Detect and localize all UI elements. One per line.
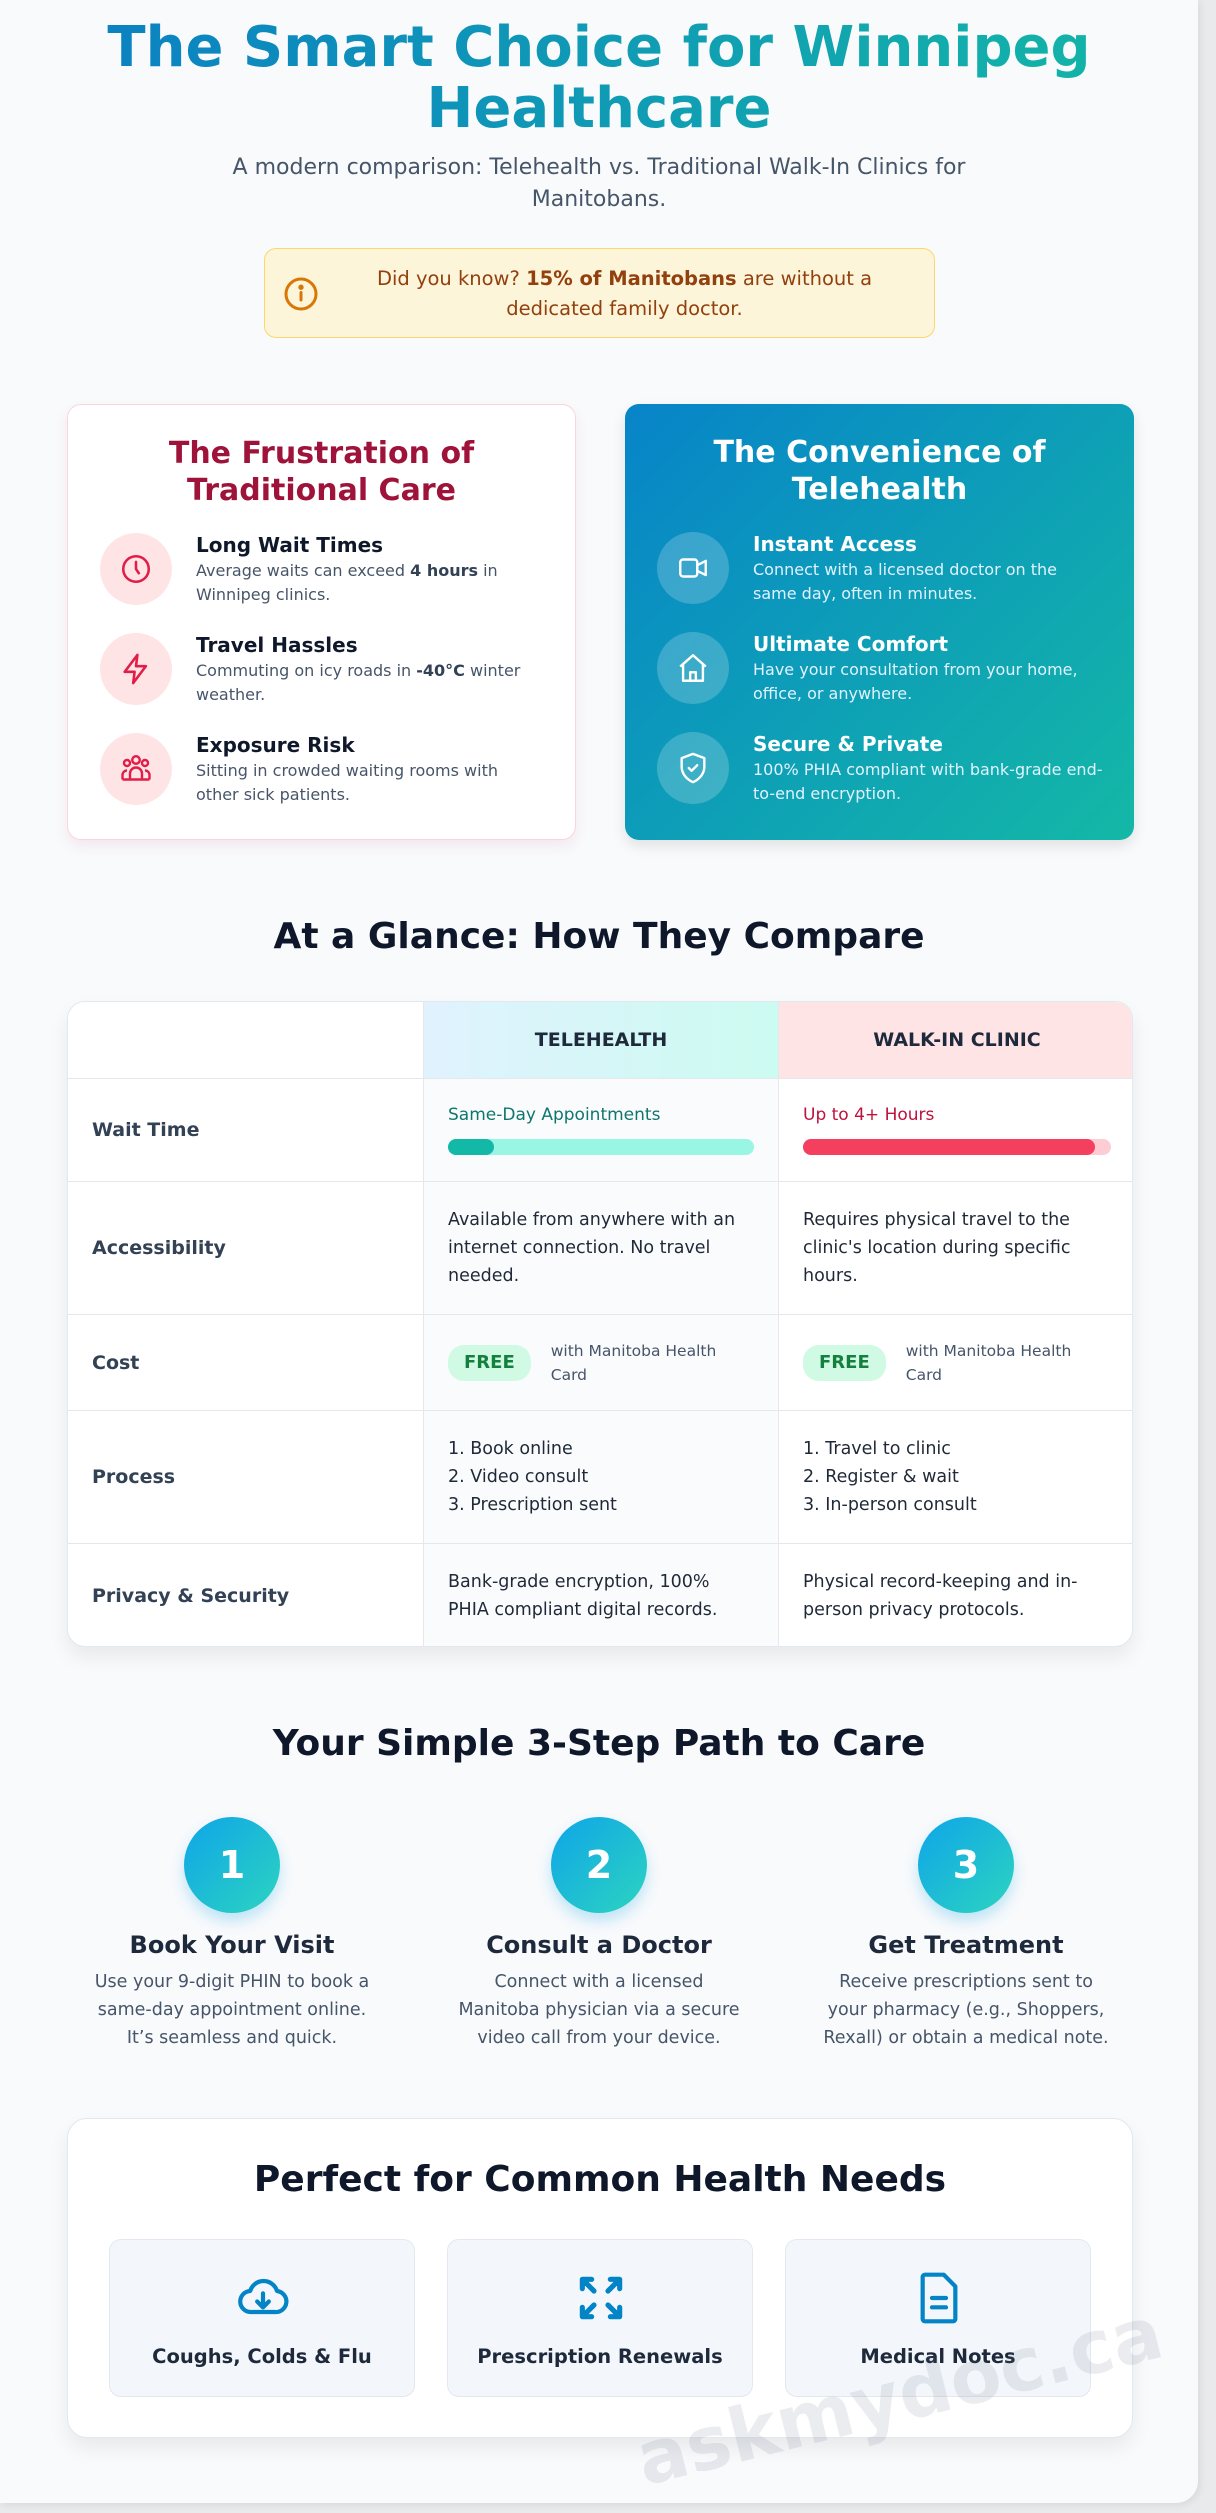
heading: Perfect for Common Health Needs [254,2159,946,2200]
column header: telehealth [424,1002,779,1079]
panel: frustration of traditional care [67,404,576,840]
item: long wait times [100,533,498,605]
callout: did you know [264,248,935,338]
title [0,17,1198,139]
callout: did you know: Did you know? 15% of Manitobans are without a dedicated family doctor. [377,267,872,320]
item: instant access: Connect with a licensed doctor on the same day, often in minutes. [753,560,1057,603]
column header: walk-in clinic [779,1002,1135,1079]
step 2: Connect with a licensed [494,1972,704,1992]
comparison table: 2. Video consult [448,1467,588,1487]
panel heading: Telehealth [792,472,967,507]
step 1: Use your 9-digit PHIN to book a [95,1972,369,1992]
row: process [68,1411,424,1544]
panel: common health needs [67,2118,1133,2438]
heading: at a glance: At a Glance: How They Compare [273,916,925,957]
title: Healthcare [426,76,772,141]
item: ultimate comfort: Have your consultation from your home, office, or anywhere. [753,660,1078,703]
watermark: askmydoc.ca [628,2290,1171,2503]
comparison table: 1. Book online [448,1439,573,1459]
row: wait time: Wait Time [92,1119,199,1141]
title: The Smart Choice for Winnipeg [107,15,1091,80]
need: prescription renewals [447,2239,753,2397]
item: ultimate comfort [657,632,1078,704]
row: accessibility [68,1182,424,1315]
panel heading: The Frustration of [169,436,474,471]
row: privacy & security [68,1544,424,1648]
heading: 3-step path: Your Simple 3-Step Path to Care [273,1723,925,1764]
item: long wait times: Long Wait Times [196,533,383,557]
panel heading: Traditional Care [187,473,456,508]
step 2: video call from your device. [477,2028,721,2048]
step 1: Book Your Visit [130,1931,334,1959]
panel heading: The Convenience of [713,435,1046,470]
panel heading [169,436,474,508]
comparison table: 3. In-person consult [803,1495,977,1515]
panel heading [713,435,1046,507]
item: travel hassles: Travel Hassles [196,633,358,657]
need: medical notes [785,2239,1091,2397]
step 3: 3 [953,1843,979,1887]
column header: telehealth: TELEHEALTH [535,1029,667,1051]
item: ultimate comfort: Ultimate Comfort [753,632,948,656]
need: prescription renewals: Prescription Renewals [477,2345,723,2368]
step 3: Get Treatment [868,1931,1064,1959]
row: accessibility: Accessibility [92,1237,226,1259]
step 2: Consult a Doctor [486,1931,712,1959]
item: secure & private: Secure & Private [753,732,943,756]
step 3: Rexall) or obtain a medical note. [823,2028,1109,2048]
comparison table: Same-Day Appointments [448,1105,660,1125]
item: travel hassles [100,633,520,705]
item: instant access: Instant Access [753,532,917,556]
step 1 [95,1817,369,2048]
panel: convenience of telehealth [625,404,1134,840]
step 1: same-day appointment online. [98,2000,366,2020]
comparison table: 3. Prescription sent [448,1495,617,1515]
step 2: 2 [586,1843,612,1887]
item: travel hassles: Commuting on icy roads in -40°C winter weather. [196,661,520,704]
item: exposure risk: Exposure Risk [196,733,355,757]
step 2: Manitoba physician via a secure [458,2000,740,2020]
step 3: Receive prescriptions sent to [839,1972,1093,1992]
row: cost: Cost [92,1352,139,1374]
row: wait time [68,1079,424,1182]
item: secure & private [657,732,1102,804]
comparison table: Available from anywhere with an internet connection. No travel needed. [448,1210,735,1286]
step 1: It’s seamless and quick. [127,2028,337,2048]
comparison table: Bank-grade encryption, 100% PHIA compliant digital records. [448,1572,717,1620]
need: medical notes: Medical Notes [860,2345,1016,2368]
step 1: 1 [219,1843,245,1887]
comparison table: FREE [819,1352,870,1372]
comparison table: FREE [464,1352,515,1372]
comparison table: Up to 4+ Hours [803,1105,934,1125]
row: cost [68,1315,424,1411]
item: exposure risk: Sitting in crowded waiting rooms with other sick patients. [196,761,498,804]
comparison table: 1. Travel to clinic [803,1439,951,1459]
comparison table: Requires physical travel to the clinic's location during specific hours. [803,1210,1071,1286]
comparison table: Physical record-keeping and in-person privacy protocols. [803,1572,1078,1620]
step 3: your pharmacy (e.g., Shoppers, [828,2000,1104,2020]
need: coughs colds flu: Coughs, Colds & Flu [152,2345,372,2368]
comparison table: 2. Register & wait [803,1467,959,1487]
comparison table: with Manitoba Health Card [906,1342,1071,1384]
item: long wait times: Average waits can exceed 4 hours in Winnipeg clinics. [196,561,498,604]
step 3 [823,1817,1109,2048]
item: secure & private: 100% PHIA compliant with bank-grade end-to-end encryption. [753,760,1102,803]
icon: info [284,278,318,310]
item: instant access [657,532,1057,604]
item: exposure risk [100,733,498,805]
column header: walk-in clinic: WALK-IN CLINIC [873,1029,1041,1051]
need: coughs colds flu [109,2239,415,2397]
row: process: Process [92,1466,175,1488]
step 2 [458,1817,740,2048]
subtitle: A modern comparison: Telehealth vs. Traditional Walk-In Clinics for Manitobans. [233,155,965,212]
row: privacy & security: Privacy & Security [92,1585,289,1607]
comparison table: with Manitoba Health Card [551,1342,716,1384]
comparison table [67,1001,1133,1647]
